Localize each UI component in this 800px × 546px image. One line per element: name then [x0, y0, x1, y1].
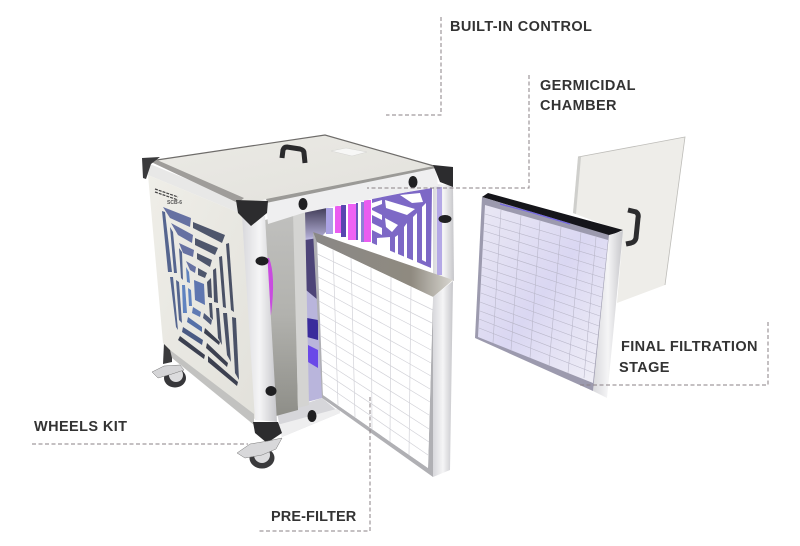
- lower left rail: [170, 350, 254, 425]
- center window: [194, 280, 205, 305]
- front caster: [237, 438, 282, 468]
- purifier cabinet: [142, 135, 454, 468]
- label: germicidal chamber: CHAMBER: [540, 98, 617, 114]
- black corner front bottom: [253, 422, 282, 443]
- blue block: [308, 345, 318, 368]
- black corner left top: [142, 157, 160, 179]
- front left post: [242, 216, 277, 422]
- galvanised post: [293, 210, 309, 408]
- final filter panel: [475, 193, 623, 398]
- black corner right top: [433, 165, 453, 187]
- label: final filtration stage: FINAL FILTRATION: [621, 339, 758, 355]
- left top band: [148, 164, 242, 214]
- dark purple gap: [305, 238, 318, 300]
- label: pre-filter: PRE-FILTER: [271, 509, 357, 525]
- right slots: [207, 243, 239, 380]
- left slots: [162, 211, 192, 330]
- bottom slots: [178, 307, 238, 386]
- label: final filtration stage: [578, 322, 768, 385]
- grille: [162, 207, 239, 386]
- top rim front-left: [149, 160, 244, 203]
- top handle: [282, 147, 305, 163]
- label: germicidal chamber: GERMICIDAL: [540, 78, 636, 94]
- logo mark: [155, 189, 182, 206]
- pre-filter panel: [313, 232, 453, 477]
- left face: [148, 175, 256, 420]
- purple block: [307, 318, 318, 340]
- upper-left slots: [163, 207, 196, 273]
- black corner front top: [236, 200, 268, 226]
- back caster: [152, 343, 186, 388]
- label: germicidal chamber: [367, 75, 636, 188]
- dark interior corner: [305, 207, 326, 240]
- lower chamber lilac: [305, 236, 322, 402]
- frame knobs: [256, 176, 452, 422]
- label: pre-filter: [258, 397, 370, 531]
- bottom rail: [277, 398, 340, 437]
- interior door panel: [265, 212, 298, 416]
- right frame post: [433, 184, 454, 281]
- top rim front-right: [266, 166, 437, 204]
- top panel: [150, 135, 448, 203]
- control plate: [331, 148, 367, 156]
- top front frame bar: [266, 168, 438, 224]
- lavender strip on post: [437, 187, 442, 275]
- back access panel with handle: [573, 137, 685, 303]
- chamber white backing: [303, 186, 433, 275]
- label: wheels kit: WHEELS KIT: [34, 419, 127, 435]
- rear grille glowing purple: [372, 188, 432, 268]
- upper-right slots: [193, 222, 225, 278]
- label: built-in control: BUILT-IN CONTROL: [450, 19, 592, 35]
- door fan cutout: [267, 258, 273, 315]
- logo mark: SCB-6: [167, 200, 182, 206]
- label: final filtration stage: STAGE: [619, 360, 670, 376]
- label: built-in control: [386, 17, 592, 115]
- purple light bars: [326, 200, 371, 242]
